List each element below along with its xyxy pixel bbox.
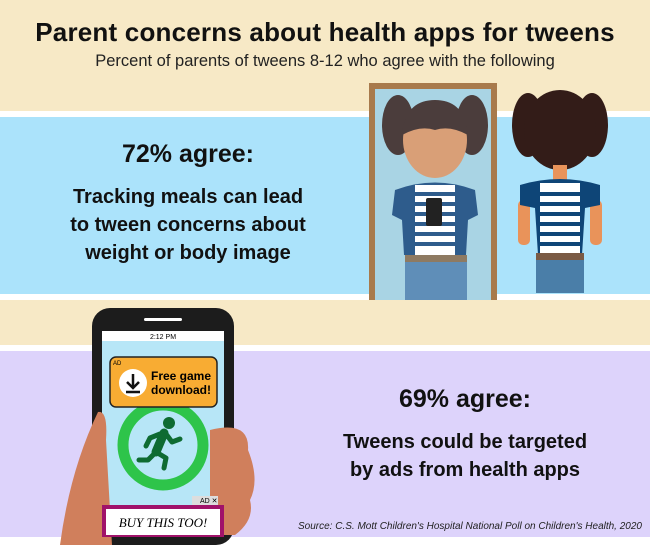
stat 2 text: 69% agree:: [399, 385, 531, 413]
girl back: [512, 90, 608, 293]
stat 1 text: [70, 140, 306, 264]
phone illustration: BUY THIS TOO!: [119, 515, 207, 530]
phone illustration: 2:12 PM: [150, 334, 176, 341]
phone illustration: AD ✕: [200, 498, 218, 505]
stat 2 text: [343, 385, 587, 481]
stat 1 text: Tracking meals can lead to tween concerns about weight or body image: [70, 186, 306, 264]
subtitle: Percent of parents of tweens 8-12 who agree with the following: [95, 52, 555, 70]
bottom ad: [102, 505, 224, 537]
runner icon: [139, 417, 180, 468]
phone illustration: download!: [151, 383, 211, 397]
source: Source: C.S. Mott Children's Hospital National Poll on Children's Health, 2020: [298, 521, 642, 532]
stat 2 text: Tweens could be targeted by ads from health apps: [343, 431, 587, 481]
ring: [123, 405, 203, 485]
stat 1 text: 72% agree:: [122, 140, 254, 168]
phone illustration: [60, 308, 255, 545]
phone illustration: AD: [113, 361, 122, 367]
mirror: [369, 83, 497, 300]
hands: [60, 412, 112, 545]
illustration: mirror and girl: [369, 83, 608, 300]
ad: [110, 357, 217, 407]
title: Parent concerns about health apps for tweens: [35, 17, 615, 47]
phone illustration: Free game: [151, 369, 211, 383]
